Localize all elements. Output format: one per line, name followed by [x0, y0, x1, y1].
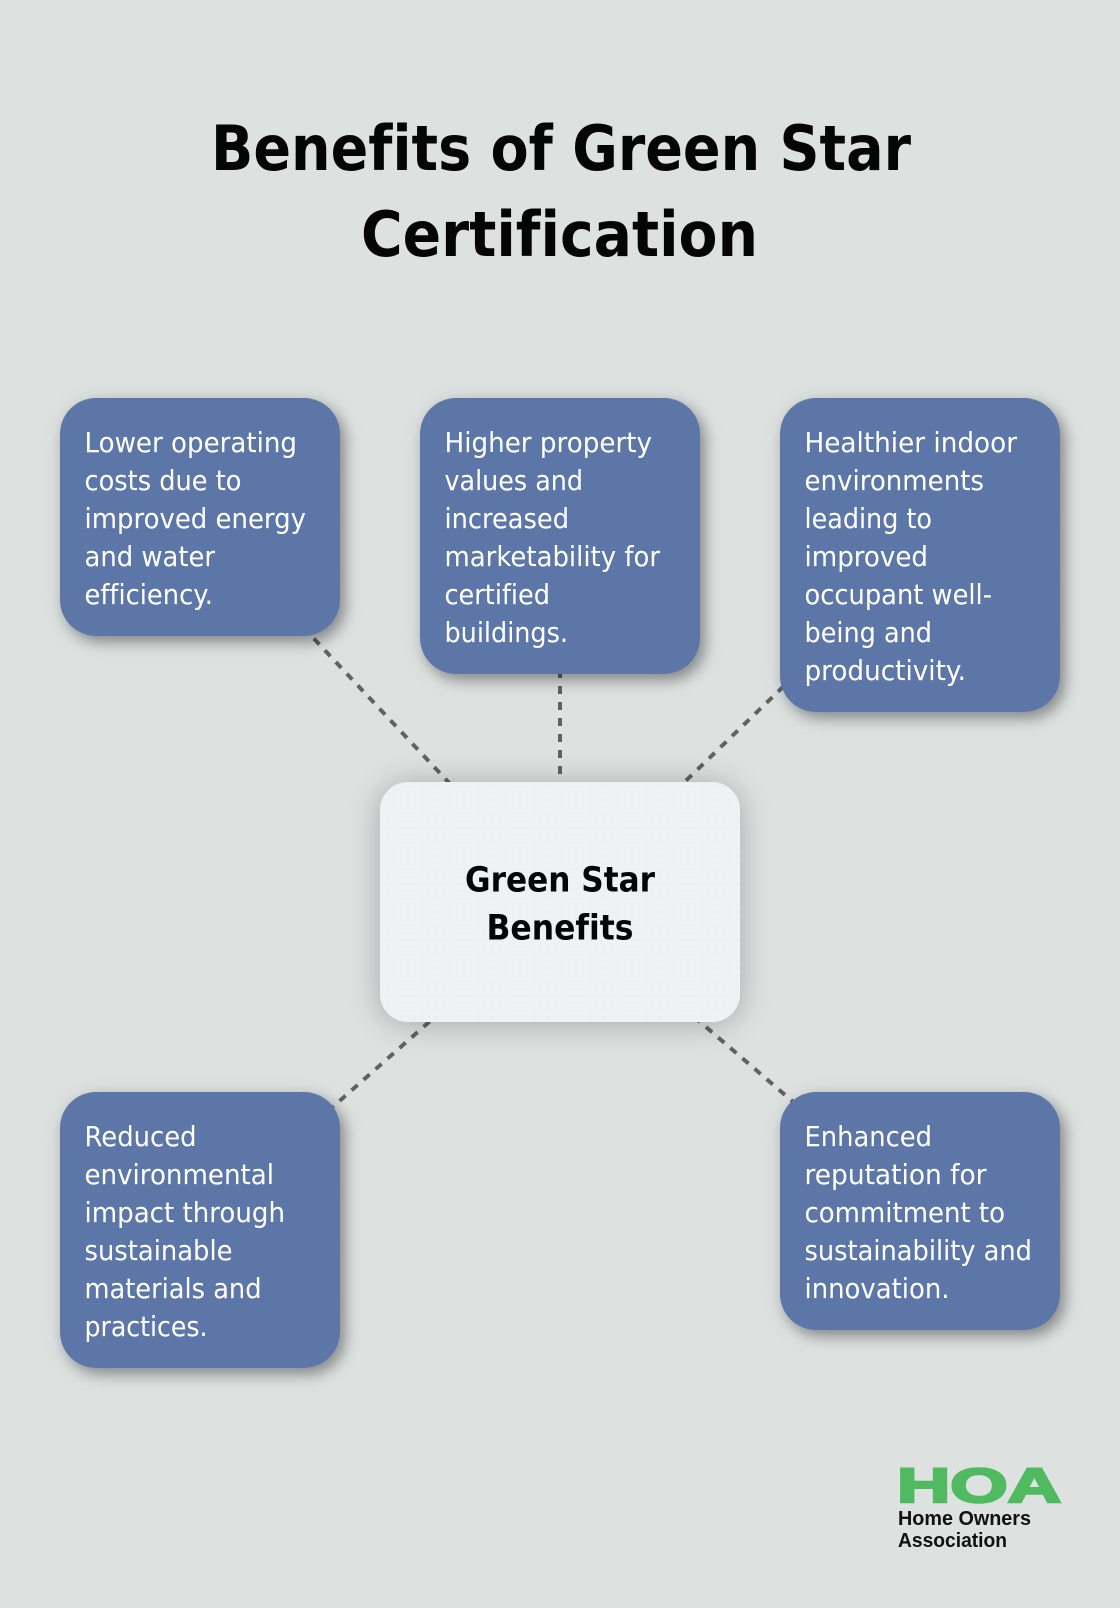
panel: reduced environmental impact: environmental: [84, 1160, 274, 1191]
panel: healthier indoor environments: environments: [804, 466, 984, 497]
panel: center node, Green Star Benefits: [380, 782, 740, 1022]
title: Certification: [361, 198, 758, 271]
panel: lower operating costs: [60, 398, 340, 636]
logo: HOA Home Owners Association: Home Owners: [898, 1508, 1031, 1530]
panel: reduced environmental impact: impact through: [84, 1198, 285, 1229]
panel: higher property values: certified: [444, 580, 550, 611]
panel: healthier indoor environments: productivity.: [804, 656, 966, 687]
panel: lower operating costs: efficiency.: [84, 580, 213, 611]
connector lines: dashed spokes from center to cards: [303, 627, 815, 1121]
panel: enhanced reputation: commitment to: [804, 1198, 1005, 1229]
panel: healthier indoor environments: being and: [804, 618, 932, 649]
panel: center node, Green Star Benefits: Green Star: [465, 860, 656, 900]
panel: reduced environmental impact: [60, 1092, 340, 1368]
title: Benefits of Green Star: [211, 112, 911, 185]
panel: healthier indoor environments: occupant well-: [804, 580, 992, 611]
panel: reduced environmental impact: practices.: [84, 1312, 208, 1343]
logo: HOA Home Owners Association: Association: [898, 1530, 1007, 1552]
panel: healthier indoor environments: Healthier indoor: [804, 428, 1018, 459]
panel: higher property values: Higher property: [444, 428, 652, 459]
panel: reduced environmental impact: materials and: [84, 1274, 262, 1305]
panel: higher property values: marketability for: [444, 542, 661, 573]
panel: enhanced reputation: Enhanced: [804, 1122, 932, 1153]
panel: healthier indoor environments: [780, 398, 1060, 712]
panel: healthier indoor environments: improved: [804, 542, 928, 573]
panel: higher property values: [420, 398, 700, 674]
panel: higher property values: values and: [444, 466, 583, 497]
panel: lower operating costs: costs due to: [84, 466, 242, 497]
panel: enhanced reputation: sustainability and: [804, 1236, 1032, 1267]
panel: lower operating costs: and water: [84, 542, 216, 573]
panel: enhanced reputation: innovation.: [804, 1274, 950, 1305]
panel: lower operating costs: Lower operating: [84, 428, 297, 459]
panel: lower operating costs: improved energy: [84, 504, 306, 535]
logo: HOA Home Owners Association: HOA: [897, 1460, 1061, 1513]
panel: higher property values: increased: [444, 504, 569, 535]
logo: HOA Home Owners Association: [897, 1460, 1061, 1552]
panel: reduced environmental impact: Reduced: [84, 1122, 196, 1153]
title: [211, 112, 911, 271]
panel: healthier indoor environments: leading to: [804, 504, 932, 535]
panel: enhanced reputation: [780, 1092, 1060, 1330]
panel: higher property values: buildings.: [444, 618, 568, 649]
panel: reduced environmental impact: sustainable: [84, 1236, 232, 1267]
panel: center node, Green Star Benefits: Benefits: [486, 908, 634, 948]
panel: enhanced reputation: reputation for: [804, 1160, 987, 1191]
